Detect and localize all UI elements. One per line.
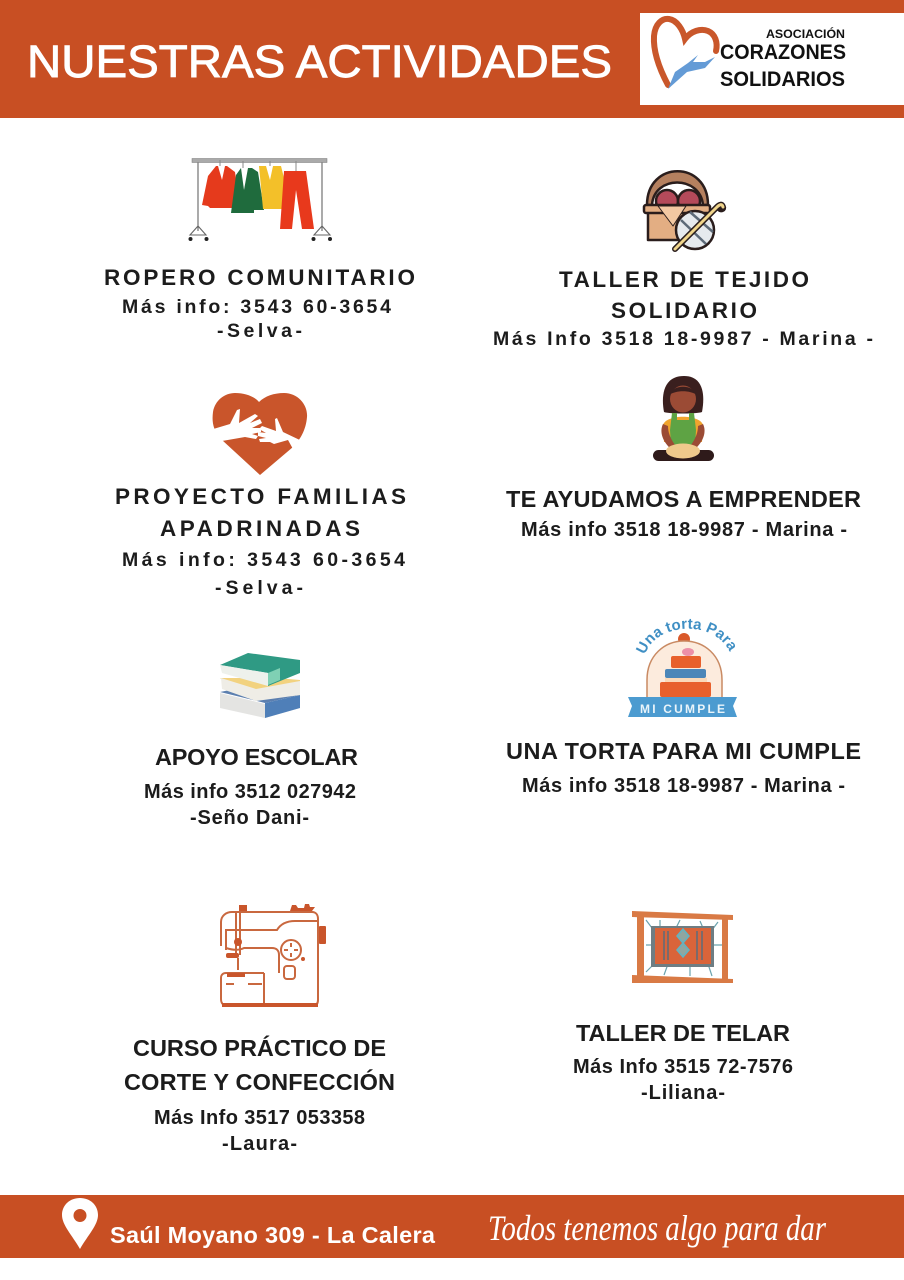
Taller de Tejido text: TALLER DE TEJIDO	[559, 267, 809, 292]
Una Torta text	[506, 738, 861, 797]
Taller de Tejido text	[493, 267, 873, 350]
icon: una torta para mi cumple: Una torta Para	[636, 618, 736, 653]
icon: loom	[632, 911, 733, 983]
icon: heart with hands	[210, 393, 307, 475]
icon: una torta para mi cumple: MI CUMPLE	[640, 702, 725, 716]
Taller de Telar text: -Liliana-	[641, 1082, 725, 1104]
Una Torta text: UNA TORTA PARA MI CUMPLE	[506, 738, 861, 764]
Proyecto Familias text: APADRINADAS	[160, 516, 360, 541]
Curso Practico text: Más Info 3517 053358	[154, 1107, 365, 1129]
Proyecto Familias text: Más info: 3543 60-3654	[122, 549, 405, 571]
Ropero Comunitario text: ROPERO COMUNITARIO	[104, 265, 415, 290]
logo: Asociación Corazones Solidarios: CORAZONES	[720, 41, 846, 64]
Taller de Telar text	[573, 1020, 793, 1104]
Taller de Tejido text: SOLIDARIO	[611, 298, 757, 323]
Curso Practico text: CURSO PRÁCTICO DE	[133, 1034, 386, 1061]
Proyecto Familias text	[115, 484, 406, 599]
title: NUESTRAS ACTIVIDADES	[27, 36, 612, 87]
slogan: Todos tenemos algo para dar	[488, 1208, 827, 1248]
Proyecto Familias text: -Selva-	[215, 577, 303, 599]
Apoyo Escolar text: Más info 3512 027942	[144, 781, 356, 803]
Taller de Telar text: Más Info 3515 72-7576	[573, 1056, 793, 1078]
header banner	[0, 0, 904, 118]
Proyecto Familias text: PROYECTO FAMILIAS	[115, 484, 406, 509]
Curso Practico text: CORTE Y CONFECCIÓN	[124, 1068, 395, 1095]
footer banner	[0, 1195, 904, 1258]
Te Ayudamos text: Más info 3518 18-9987 - Marina -	[521, 519, 847, 541]
Apoyo Escolar text	[144, 744, 358, 829]
Apoyo Escolar text: -Seño Dani-	[190, 807, 309, 829]
Ropero Comunitario text: Más info: 3543 60-3654	[122, 296, 391, 318]
icon: location pin	[62, 1198, 98, 1249]
icon: yarn basket	[644, 171, 723, 249]
Ropero Comunitario text: -Selva-	[217, 320, 302, 342]
Ropero Comunitario text	[104, 265, 415, 342]
Apoyo Escolar text: APOYO ESCOLAR	[155, 744, 358, 770]
Curso Practico text: -Laura-	[222, 1133, 297, 1155]
logo: Asociación Corazones Solidarios: ASOCIACIÓN	[766, 28, 845, 41]
icon: sewing machine	[221, 904, 326, 1007]
logo: Asociación Corazones Solidarios: SOLIDARIOS	[720, 68, 845, 91]
address: Saúl Moyano 309 - La Calera	[110, 1222, 436, 1248]
Una Torta text: Más info 3518 18-9987 - Marina -	[522, 775, 845, 797]
icon: una torta para mi cumple	[628, 618, 737, 717]
Taller de Tejido text: Más Info 3518 18-9987 - Marina -	[493, 328, 873, 350]
Te Ayudamos text	[506, 486, 861, 541]
icon: clothes rack	[188, 158, 332, 241]
logo: Asociación Corazones Solidarios	[640, 13, 904, 105]
icon: woman kneading	[653, 376, 714, 461]
Taller de Telar text: TALLER DE TELAR	[576, 1020, 790, 1046]
Curso Practico text	[124, 1034, 395, 1155]
icon: books stack	[220, 653, 300, 718]
Te Ayudamos text: TE AYUDAMOS A EMPRENDER	[506, 486, 861, 512]
